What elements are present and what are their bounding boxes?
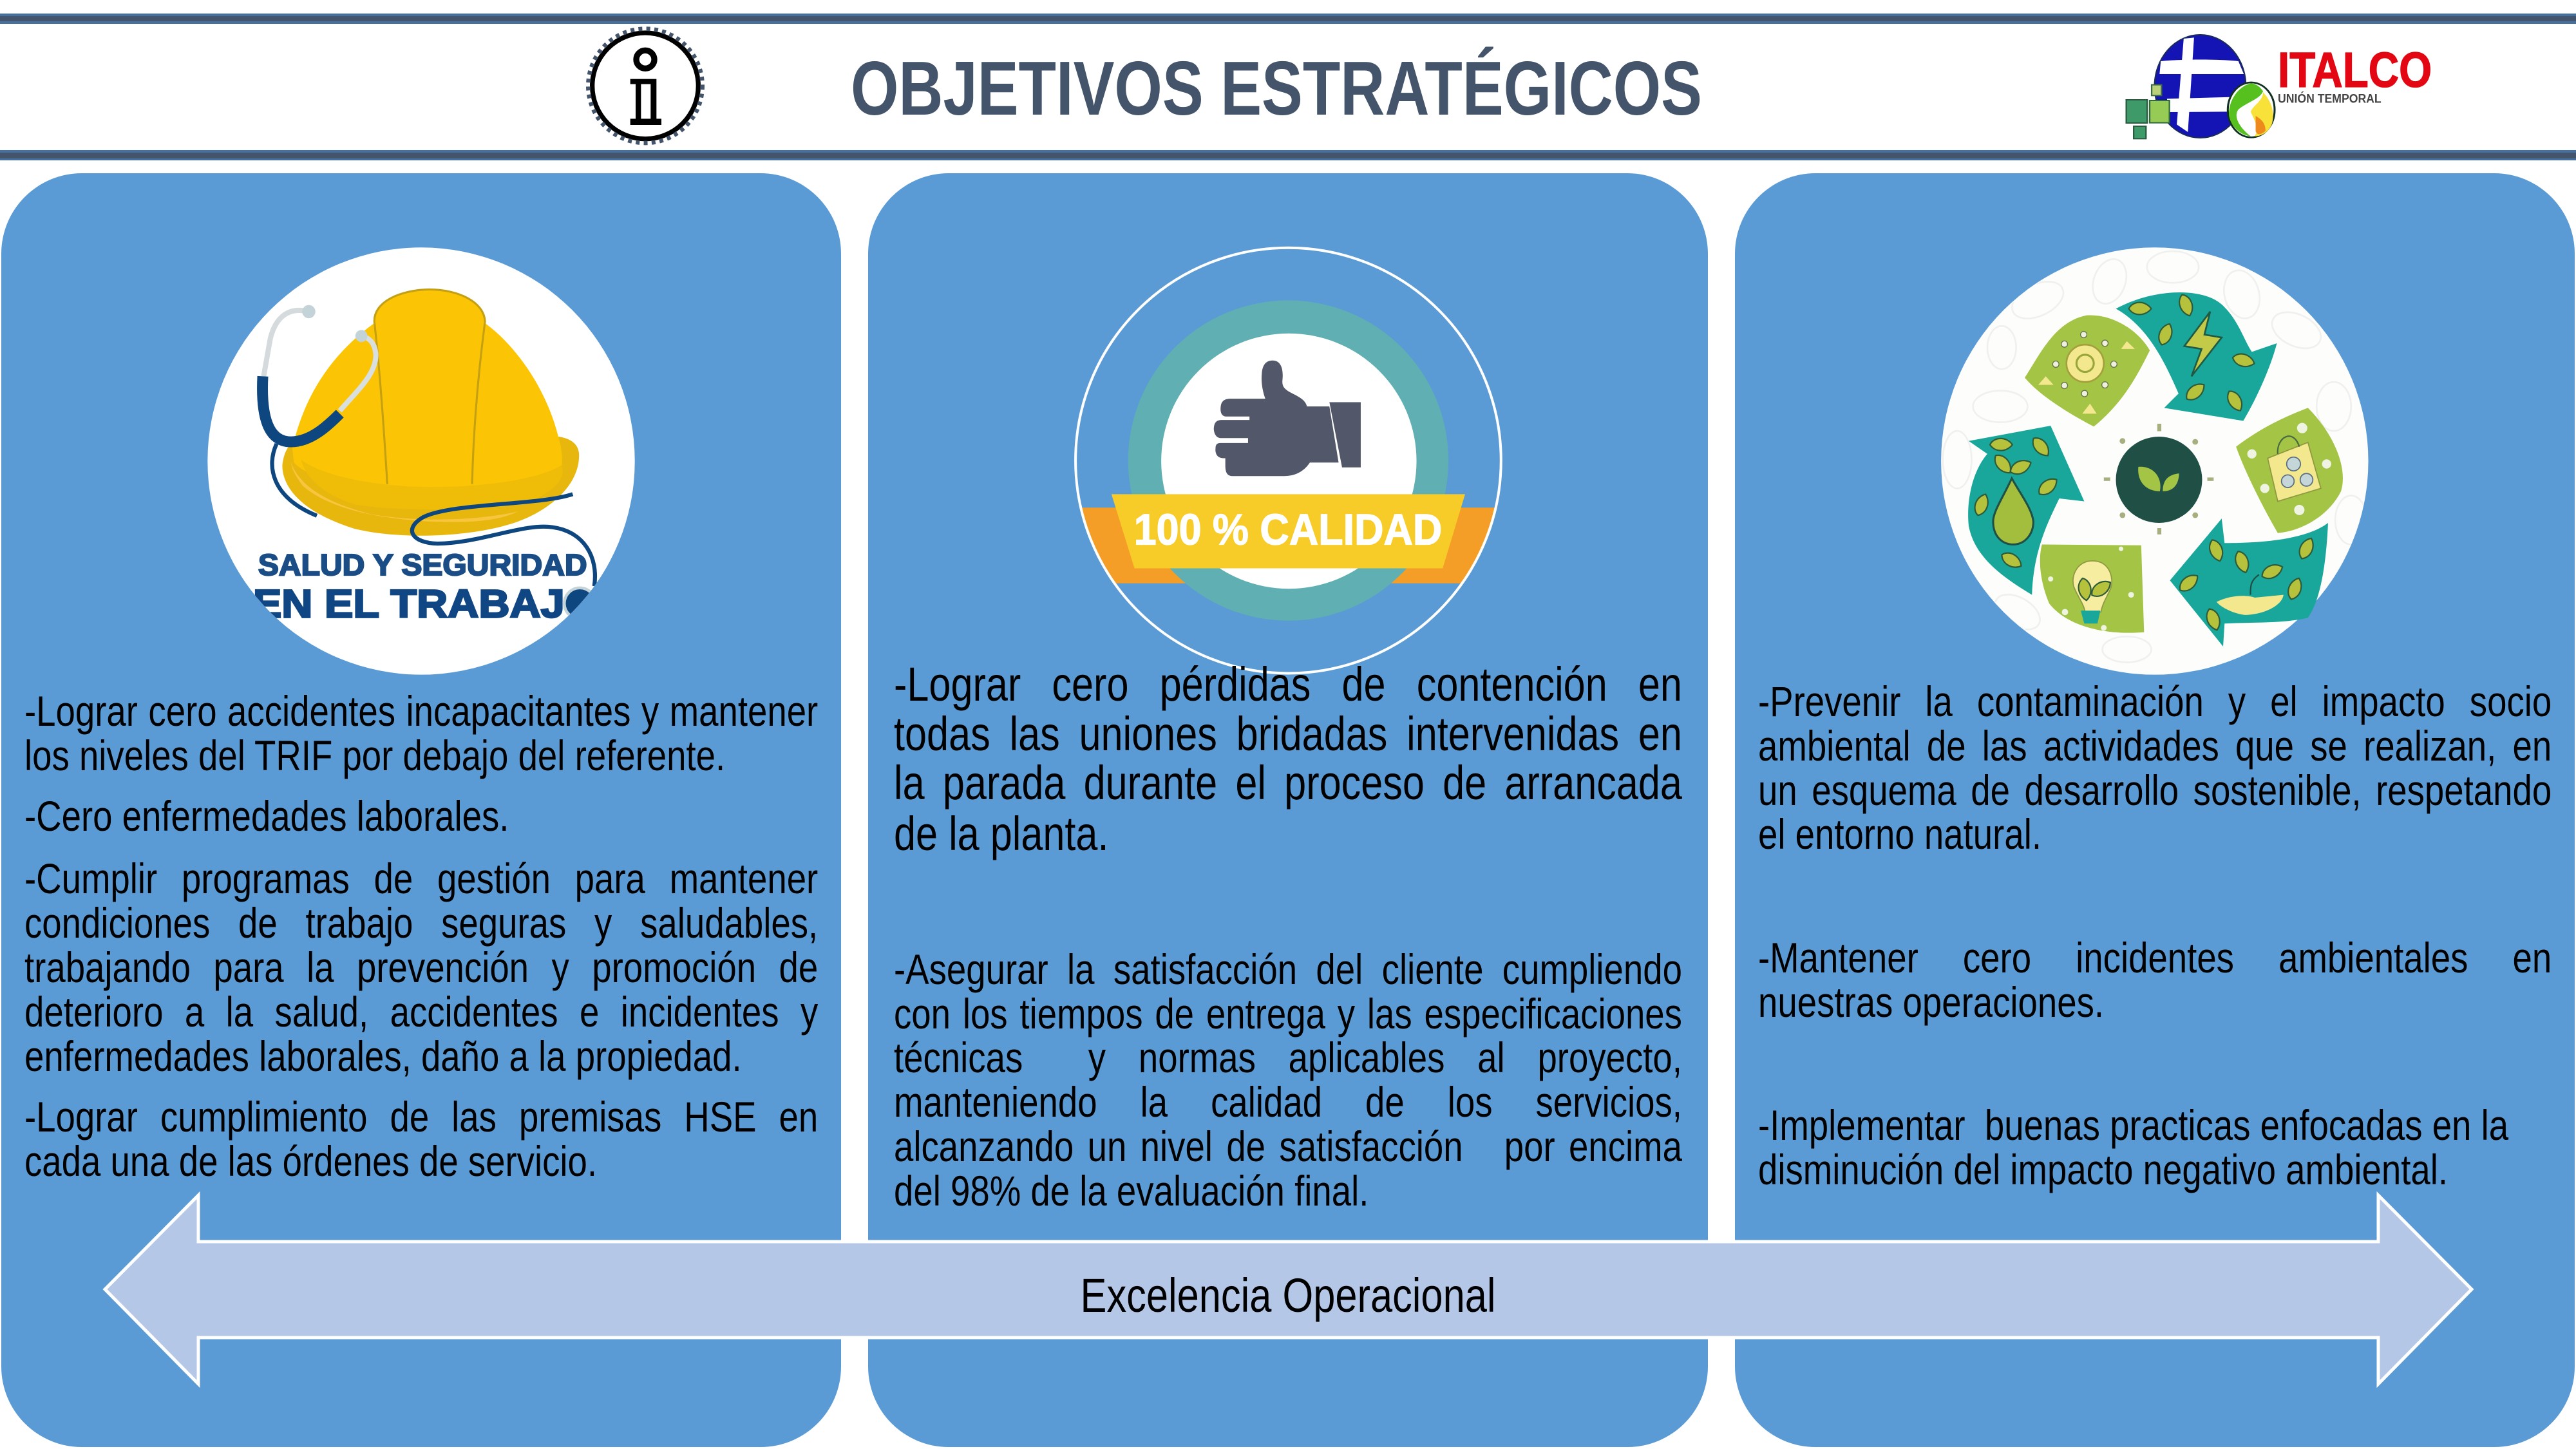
- objective: cero enfermedades: -Cero enfermedades laborales.: [24, 792, 509, 840]
- panel: medio ambiente: [1735, 173, 2575, 1447]
- objective: prevenir la contaminación: -Prevenir la contaminación y el impacto socio: [1758, 677, 2552, 725]
- objective: programas de gestión: [24, 855, 818, 1080]
- lower header bar: [0, 150, 2576, 160]
- objective: prevenir la contaminación: ambiental de las actividades que se realizan, en: [1758, 722, 2552, 770]
- objective: satisfacción del cliente: -Asegurar la satisfacción del cliente cumpliendo: [894, 945, 1682, 993]
- text block: objetivos de calidad: [894, 658, 1682, 1215]
- water drop arrow: [1968, 426, 2084, 595]
- icon: 100% calidad badge: [1074, 246, 1502, 675]
- logo: ITALCO Unión Temporal: UNIÓN TEMPORAL: [2278, 91, 2382, 106]
- objective: prevenir la contaminación: el entorno natural.: [1758, 810, 2041, 858]
- top header bar: [0, 14, 2576, 24]
- objective: satisfacción del cliente: alcanzando un nivel de satisfacción por encima: [894, 1122, 1682, 1170]
- objective: programas de gestión: trabajando para la prevención y promoción de: [24, 943, 818, 991]
- panel: salud y seguridad: [1, 173, 841, 1447]
- objective: buenas prácticas: disminución del impacto negativo ambiental.: [1758, 1146, 2448, 1193]
- objective: cero pérdidas de contención: de la planta.: [894, 807, 1108, 860]
- objective: satisfacción del cliente: técnicas y normas aplicables al proyecto,: [894, 1034, 1682, 1081]
- icon: recycling environment wheel: [1941, 247, 2369, 675]
- icon: hard hat with stethoscope: EN EL TRABAJO: [253, 582, 598, 626]
- logo: ITALCO Unión Temporal: [2125, 34, 2432, 139]
- hand arrow: [2170, 518, 2328, 647]
- icon: hard hat with stethoscope: SALUD Y SEGURIDAD: [258, 548, 587, 582]
- objective: buenas prácticas: -Implementar buenas practicas enfocadas en la: [1758, 1101, 2508, 1149]
- panel: calidad: [868, 173, 1708, 1447]
- sun segment: [2025, 315, 2150, 426]
- objective: buenas prácticas: [1758, 1099, 2552, 1195]
- objective: cero pérdidas de contención: -Lograr cero pérdidas de contención en: [894, 658, 1682, 711]
- objective: programas de gestión: enfermedades laborales, daño a la propiedad.: [24, 1032, 742, 1080]
- objective: satisfacción del cliente: del 98% de la evaluación final.: [894, 1167, 1368, 1215]
- objective: cero accidentes: [24, 687, 818, 779]
- text block: objetivos ambientales: [1758, 676, 2552, 1195]
- center leaf circle: [2104, 424, 2213, 535]
- objective: satisfacción del cliente: [894, 945, 1682, 1215]
- objective: cero pérdidas de contención: todas las uniones bridadas intervenidas en: [894, 707, 1682, 761]
- recycled bag segment: [2236, 408, 2343, 533]
- arrow: excelencia operacional: Excelencia Operacional: [1081, 1269, 1495, 1322]
- icon: information badge: [586, 26, 705, 146]
- objective: satisfacción del cliente: manteniendo la calidad de los servicios,: [894, 1078, 1682, 1126]
- objective: premisas HSE: cada una de las órdenes de servicio.: [24, 1137, 597, 1185]
- icon: 100% calidad badge: 100 % CALIDAD: [1134, 506, 1442, 554]
- objective: programas de gestión: -Cumplir programas de gestión para mantener: [24, 855, 818, 902]
- objective: cero accidentes: -Lograr cero accidentes incapacitantes y mantener: [24, 687, 818, 735]
- title: OBJETIVOS ESTRATÉGICOS: [851, 46, 1702, 131]
- objective: programas de gestión: deterioro a la salud, accidentes e incidentes y: [24, 988, 818, 1036]
- objective: prevenir la contaminación: [1758, 676, 2552, 860]
- objective: cero incidentes ambientales: nuestras operaciones.: [1758, 978, 2104, 1026]
- objective: cero incidentes ambientales: [1758, 932, 2552, 1028]
- objective: premisas HSE: -Lograr cumplimiento de las premisas HSE en: [24, 1093, 818, 1141]
- objective: cero accidentes: los niveles del TRIF por debajo del referente.: [24, 732, 725, 779]
- text block: objetivos de salud y seguridad: [24, 687, 818, 1185]
- logo: ITALCO Unión Temporal: ITALCO: [2278, 42, 2432, 98]
- objective: prevenir la contaminación: un esquema de desarrollo sostenible, respetando: [1758, 766, 2552, 814]
- icon: hard hat with stethoscope: [207, 247, 635, 675]
- energy arrow: [2116, 292, 2277, 421]
- objective: cero incidentes ambientales: -Mantener cero incidentes ambientales en: [1758, 934, 2552, 981]
- objective: cero pérdidas de contención: [894, 658, 1682, 860]
- light bulb segment: [2040, 544, 2144, 633]
- objective: premisas HSE: [24, 1093, 818, 1185]
- objective: cero pérdidas de contención: la parada durante el proceso de arrancada: [894, 756, 1682, 810]
- objective: satisfacción del cliente: con los tiempos de entrega y las especificaciones: [894, 990, 1682, 1037]
- objective: programas de gestión: condiciones de trabajo seguras y saludables,: [24, 899, 818, 947]
